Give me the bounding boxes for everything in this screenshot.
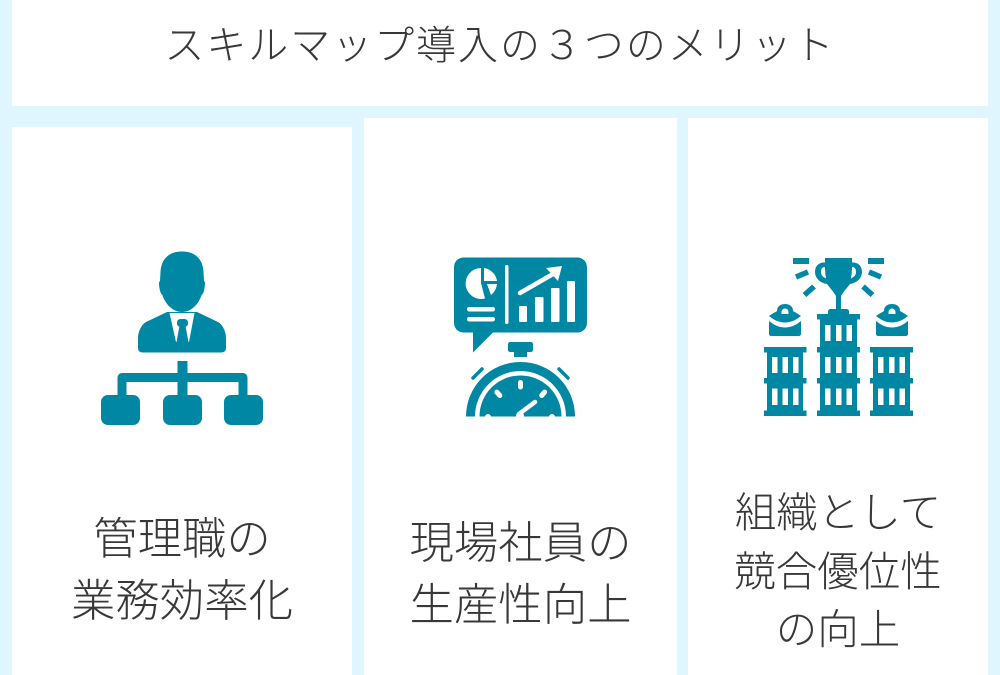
text: competitiveness bbox=[734, 489, 942, 653]
left bag bbox=[769, 304, 801, 336]
right tower bbox=[870, 347, 913, 416]
text: competitiveness: 競合優位性 bbox=[734, 548, 942, 594]
text: productivity bbox=[410, 519, 631, 630]
heading: スキルマップ導入の３つのメリット bbox=[164, 24, 836, 68]
icon: report and stopwatch bbox=[454, 258, 587, 420]
right bag bbox=[876, 304, 908, 336]
icon: manager hierarchy bbox=[101, 252, 263, 425]
text: management efficiency: 業務効率化 bbox=[71, 577, 293, 626]
text: management efficiency bbox=[71, 515, 293, 626]
panel: competitiveness bbox=[688, 118, 988, 675]
panel: management efficiency bbox=[12, 127, 352, 675]
left tower bbox=[764, 347, 806, 416]
center tower bbox=[817, 314, 860, 416]
panel: title bar bbox=[12, 0, 988, 106]
panel: productivity bbox=[364, 118, 677, 675]
text: management efficiency: 管理職の bbox=[93, 515, 271, 564]
text: competitiveness: 組織として bbox=[735, 489, 941, 536]
icon: trophy and buildings bbox=[764, 258, 913, 416]
text: competitiveness: の向上 bbox=[776, 606, 900, 653]
text: productivity: 現場社員の bbox=[410, 519, 631, 568]
text: productivity: 生産性向上 bbox=[410, 581, 631, 630]
